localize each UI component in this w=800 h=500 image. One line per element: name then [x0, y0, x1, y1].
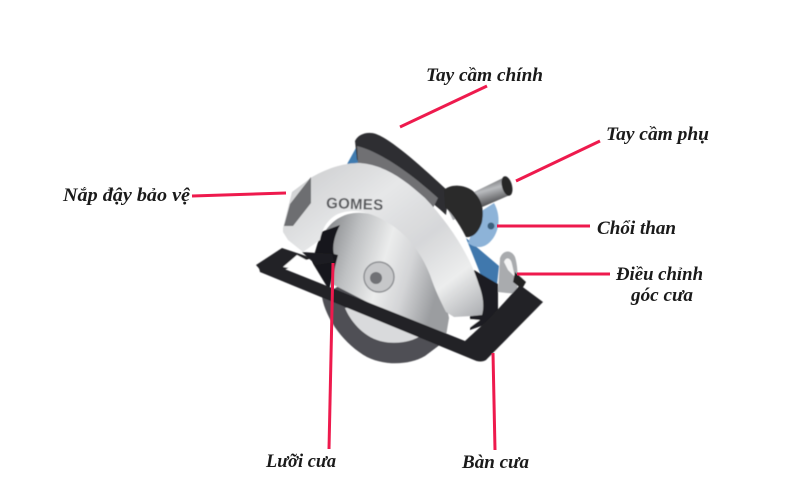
blade dark side — [312, 225, 340, 290]
label: angle adjustment line 2: góc cưa — [630, 285, 694, 306]
line: guard — [192, 193, 286, 196]
guard clamp — [302, 252, 334, 265]
angle adjuster bracket — [498, 251, 518, 294]
base plate left frame — [256, 248, 312, 272]
adjuster knob — [513, 272, 526, 289]
dark mechanism — [470, 270, 498, 330]
bracket slot — [504, 258, 515, 277]
lower blade visible — [345, 305, 422, 343]
carbon brush cap — [488, 222, 494, 230]
base plate left opening — [283, 255, 312, 271]
brand name: GOMES — [326, 195, 384, 214]
blade guard upper — [283, 163, 483, 317]
blade — [322, 213, 449, 342]
line: base plate — [493, 353, 495, 450]
base plate right opening — [454, 318, 480, 332]
auxiliary handle end — [500, 175, 514, 197]
line: brush — [497, 224, 590, 228]
motor end cap — [468, 203, 499, 247]
main handle — [355, 133, 449, 215]
auxiliary handle shaft — [472, 177, 510, 208]
base plate front strip — [258, 264, 543, 362]
circular saw — [256, 133, 543, 363]
line: blade — [329, 263, 333, 449]
label: base: Bàn cưa — [461, 452, 529, 473]
line: main handle — [400, 86, 487, 127]
label: main handle: Tay cầm chính — [426, 65, 543, 86]
blue sliver behind handle — [346, 146, 366, 166]
main handle inner — [357, 146, 438, 210]
guard vent — [284, 177, 311, 226]
silver shaft — [447, 204, 459, 220]
pointer lines — [192, 86, 610, 450]
line: auxiliary handle — [516, 141, 600, 181]
knob grip — [444, 186, 483, 237]
label: blade: Lưỡi cưa — [265, 451, 336, 472]
blade nut — [370, 272, 382, 284]
line: angle adjust — [517, 272, 610, 276]
label: safety guard: Nắp đậy bảo vệ — [62, 185, 191, 206]
blue motor lower body — [466, 238, 499, 285]
label: angle adjustment: Điều chỉnh — [615, 264, 703, 285]
lower blade guard — [322, 285, 449, 363]
label: carbon brush: Chổi than — [597, 218, 676, 239]
blade flange — [364, 262, 394, 292]
label: auxiliary handle: Tay cầm phụ — [606, 124, 709, 145]
